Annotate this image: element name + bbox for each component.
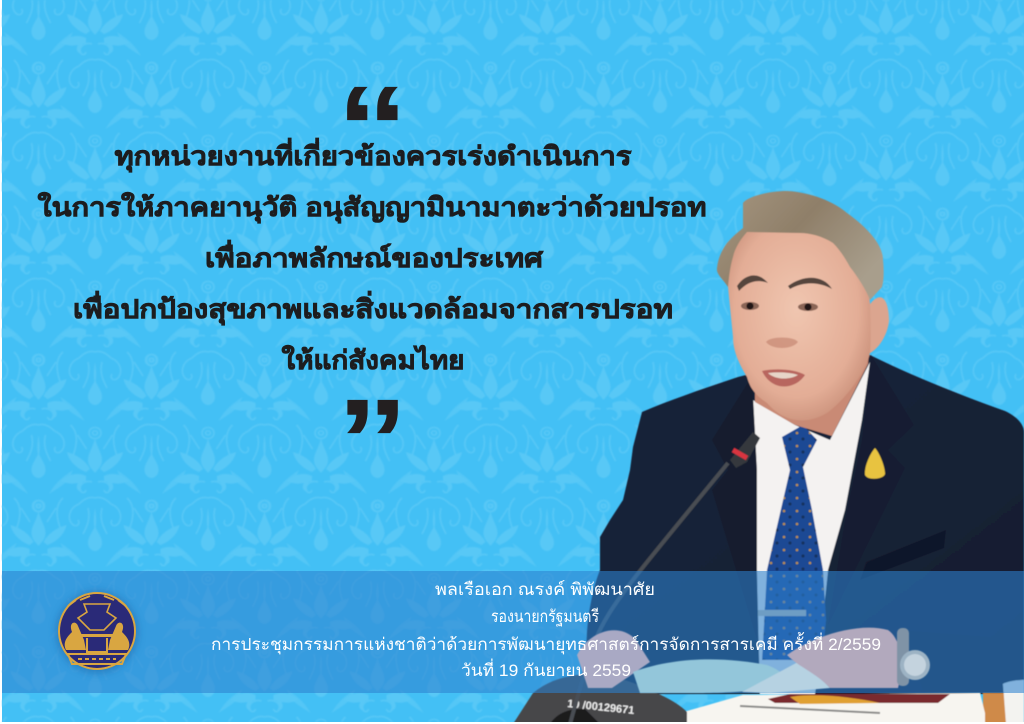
tie clip <box>758 610 806 616</box>
mouth <box>762 369 805 387</box>
wrist watch <box>897 628 909 686</box>
quote text: เพื่อปกป้องสุขภาพและสิ่งแวดล้อมจากสารปรอท <box>73 290 673 326</box>
left hand <box>577 630 650 688</box>
eyebrows <box>737 275 768 291</box>
caption text: พลเรือเอก ณรงค์ พิพัฒนาศัย <box>435 580 655 599</box>
jacket <box>586 355 1024 694</box>
right lapel <box>828 355 914 625</box>
quote text <box>38 137 706 375</box>
caption band <box>2 571 1024 693</box>
caption text <box>211 580 881 680</box>
hands, papers and watch seen through the band <box>577 628 930 693</box>
right hand <box>787 628 901 688</box>
papers <box>633 659 785 693</box>
tie <box>762 425 826 660</box>
photo: speaker at the microphone <box>513 191 1024 724</box>
quote text: เพื่อภาพลักษณ์ของประเทศ <box>205 239 544 273</box>
quote text: ทุกหน่วยงานที่เกี่ยวข้องควรเร่งดำเนินการ <box>114 137 632 173</box>
quote text: ในการให้ภาคยานุวัติ อนุสัญญามินามาตะว่าด้วยปรอท <box>38 192 706 224</box>
caption text: การประชุมกรรมการแห่งชาติว่าด้วยการพัฒนายุทธศาสตร์การจัดการสารเคมี ครั้งที่ 2/2559 <box>211 632 881 655</box>
microphone base <box>513 675 687 724</box>
shirt <box>753 362 870 694</box>
caption text: วันที่ 19 กันยายน 2559 <box>461 658 631 680</box>
microphone base: 10 /00129671 <box>567 698 635 717</box>
emblem seal <box>56 591 138 673</box>
microphone stem and head <box>570 432 760 724</box>
ears and face <box>728 218 889 420</box>
table edge <box>983 693 1024 724</box>
cup <box>1003 680 1024 724</box>
quote text: ให้แก่สังคมไทย <box>282 344 464 375</box>
sleeve <box>900 630 1024 694</box>
book <box>680 693 985 724</box>
caption text: รองนายกรัฐมนตรี <box>491 607 599 627</box>
left lapel <box>712 376 757 640</box>
opening quote mark: “ <box>337 61 408 193</box>
nose shadow <box>766 338 798 348</box>
lapel pin <box>865 448 885 479</box>
hair <box>717 191 884 300</box>
eyes <box>741 302 759 310</box>
neck <box>755 340 870 436</box>
closing quote mark: ” <box>337 374 408 506</box>
pocket <box>860 530 946 580</box>
